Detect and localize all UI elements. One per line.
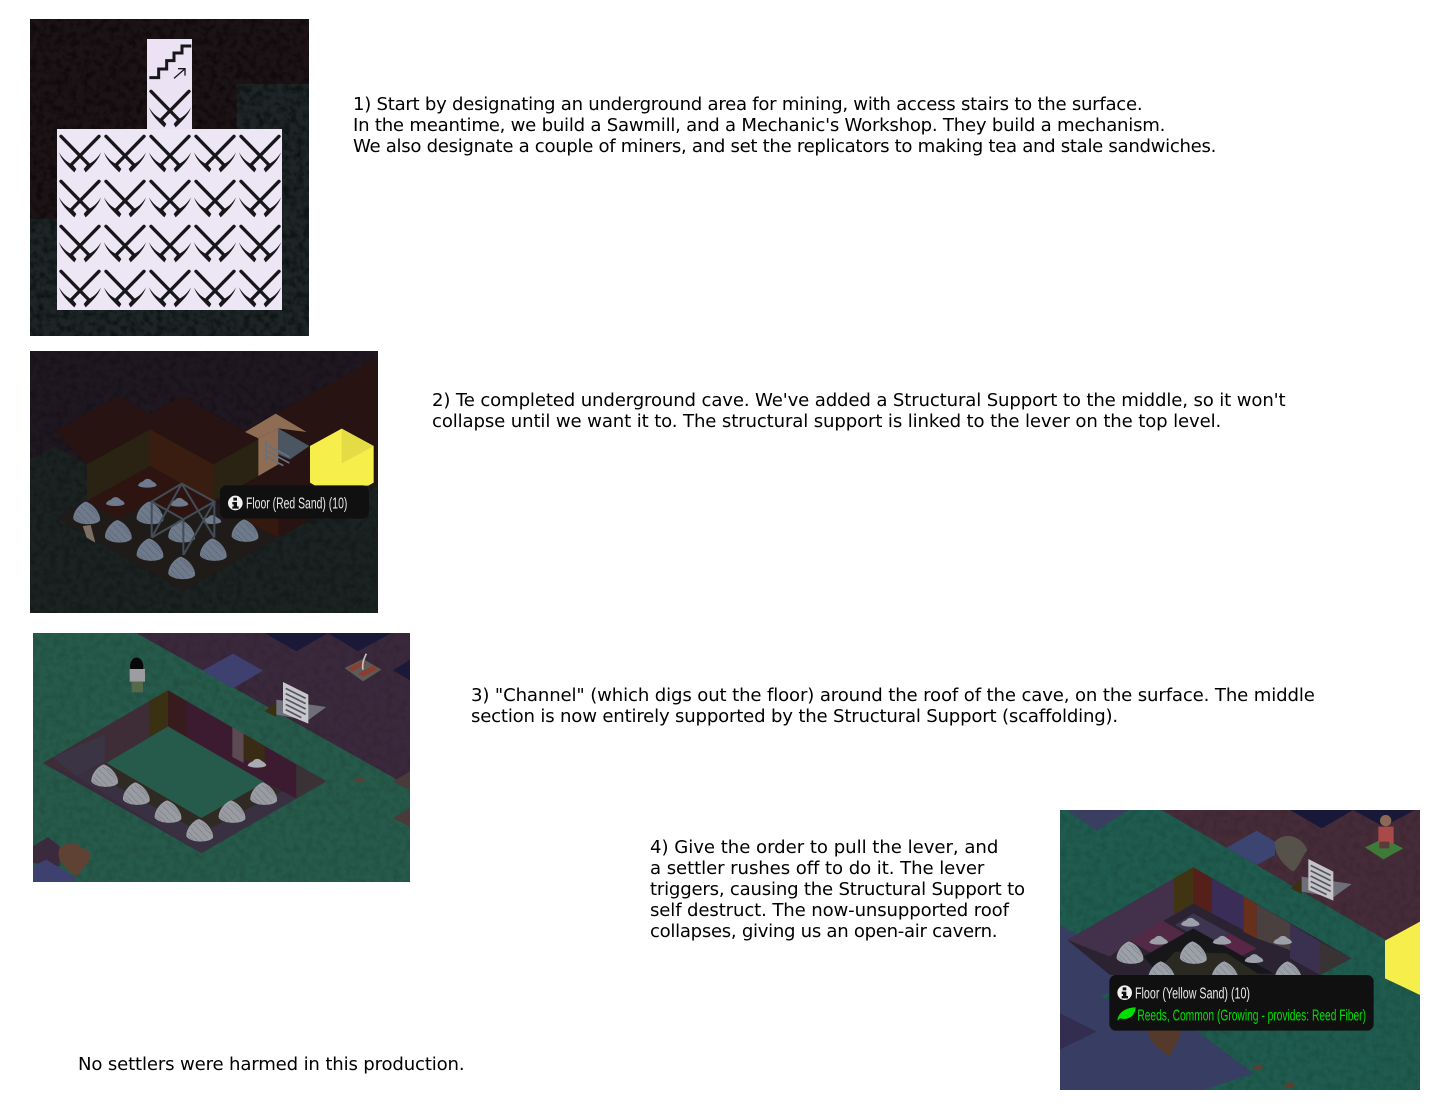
step 4 text: collapses, giving us an open-air cavern. [650,921,997,942]
panel 3: channelled cave screenshot [33,633,410,882]
lever [345,654,381,681]
step 1 text: 1) Start by designating an underground area for mining, with access stairs to the surface. [353,94,1142,115]
stairs to the surface [245,414,309,476]
wild animal under tooltip [1147,1030,1181,1057]
rubble piles [1117,918,1302,984]
step 4 text [650,837,1025,942]
icon: leaf [1117,1007,1136,1021]
open pit with collapsed roof [1067,867,1352,975]
tooltip: floor yellow sand: Floor (Yellow Sand) (10) [1135,986,1250,1003]
background tiles [1060,810,1415,1090]
panel 1: mining designation screenshot [30,19,309,336]
step 1 text: In the meantime, we build a Sawmill, and a Mechanic's Workshop. They build a mechanism. [353,115,1165,136]
panel 4: collapsed open-air cavern screenshot [1060,810,1420,1090]
rubble piles [91,764,277,842]
step 4 text: self destruct. The now-unsupported roof [650,900,1009,921]
structural support scaffold [152,484,214,555]
step 3 text: section is now entirely supported by the Structural Support (scaffolding). [471,706,1118,727]
step 4 text: 4) Give the order to pull the lever, and [650,837,998,858]
step 4 text: triggers, causing the Structural Support to [650,879,1025,900]
roof [55,357,378,538]
icon: stairs up [149,46,191,78]
step 3 text [471,685,1315,727]
open pit [43,690,326,853]
cave floor [57,466,278,591]
background tiles [33,633,410,882]
step 4 text: a settler rushes off to do it. The lever [650,858,984,879]
mining designation tiles [57,39,282,310]
hauling animal [1275,836,1307,872]
yellow cursor block [1385,922,1420,995]
step 3 text: 3) "Channel" (which digs out the floor) around the roof of the cave, on the surface. The middle [471,685,1315,706]
tooltip: floor yellow sand [1109,975,1374,1031]
yellow cursor block [310,429,374,486]
step 2 text: collapse until we want it to. The structural support is linked to the lever on the top level. [432,411,1221,432]
stairs sign [265,682,326,724]
settler [83,525,95,543]
panel 2: completed underground cave screenshot [30,351,378,613]
settler on plant [1365,815,1403,859]
animal [59,843,90,875]
step 2 text: 2) Te completed underground cave. We've added a Structural Support to the middle, so it won't [432,390,1285,411]
rubble piles [73,479,258,579]
step 2 text [432,390,1286,432]
icons: crossed pickaxes [59,91,281,307]
stairs sign [1291,859,1352,901]
cave walls [87,429,278,554]
tooltip: floor red sand [220,485,369,519]
step 1 text [353,94,1216,157]
settler [130,658,145,692]
step 1 text: We also designate a couple of miners, and set the replicators to making tea and stale sandwiches. [353,136,1216,157]
closing note: No settlers were harmed in this production. [78,1054,464,1075]
